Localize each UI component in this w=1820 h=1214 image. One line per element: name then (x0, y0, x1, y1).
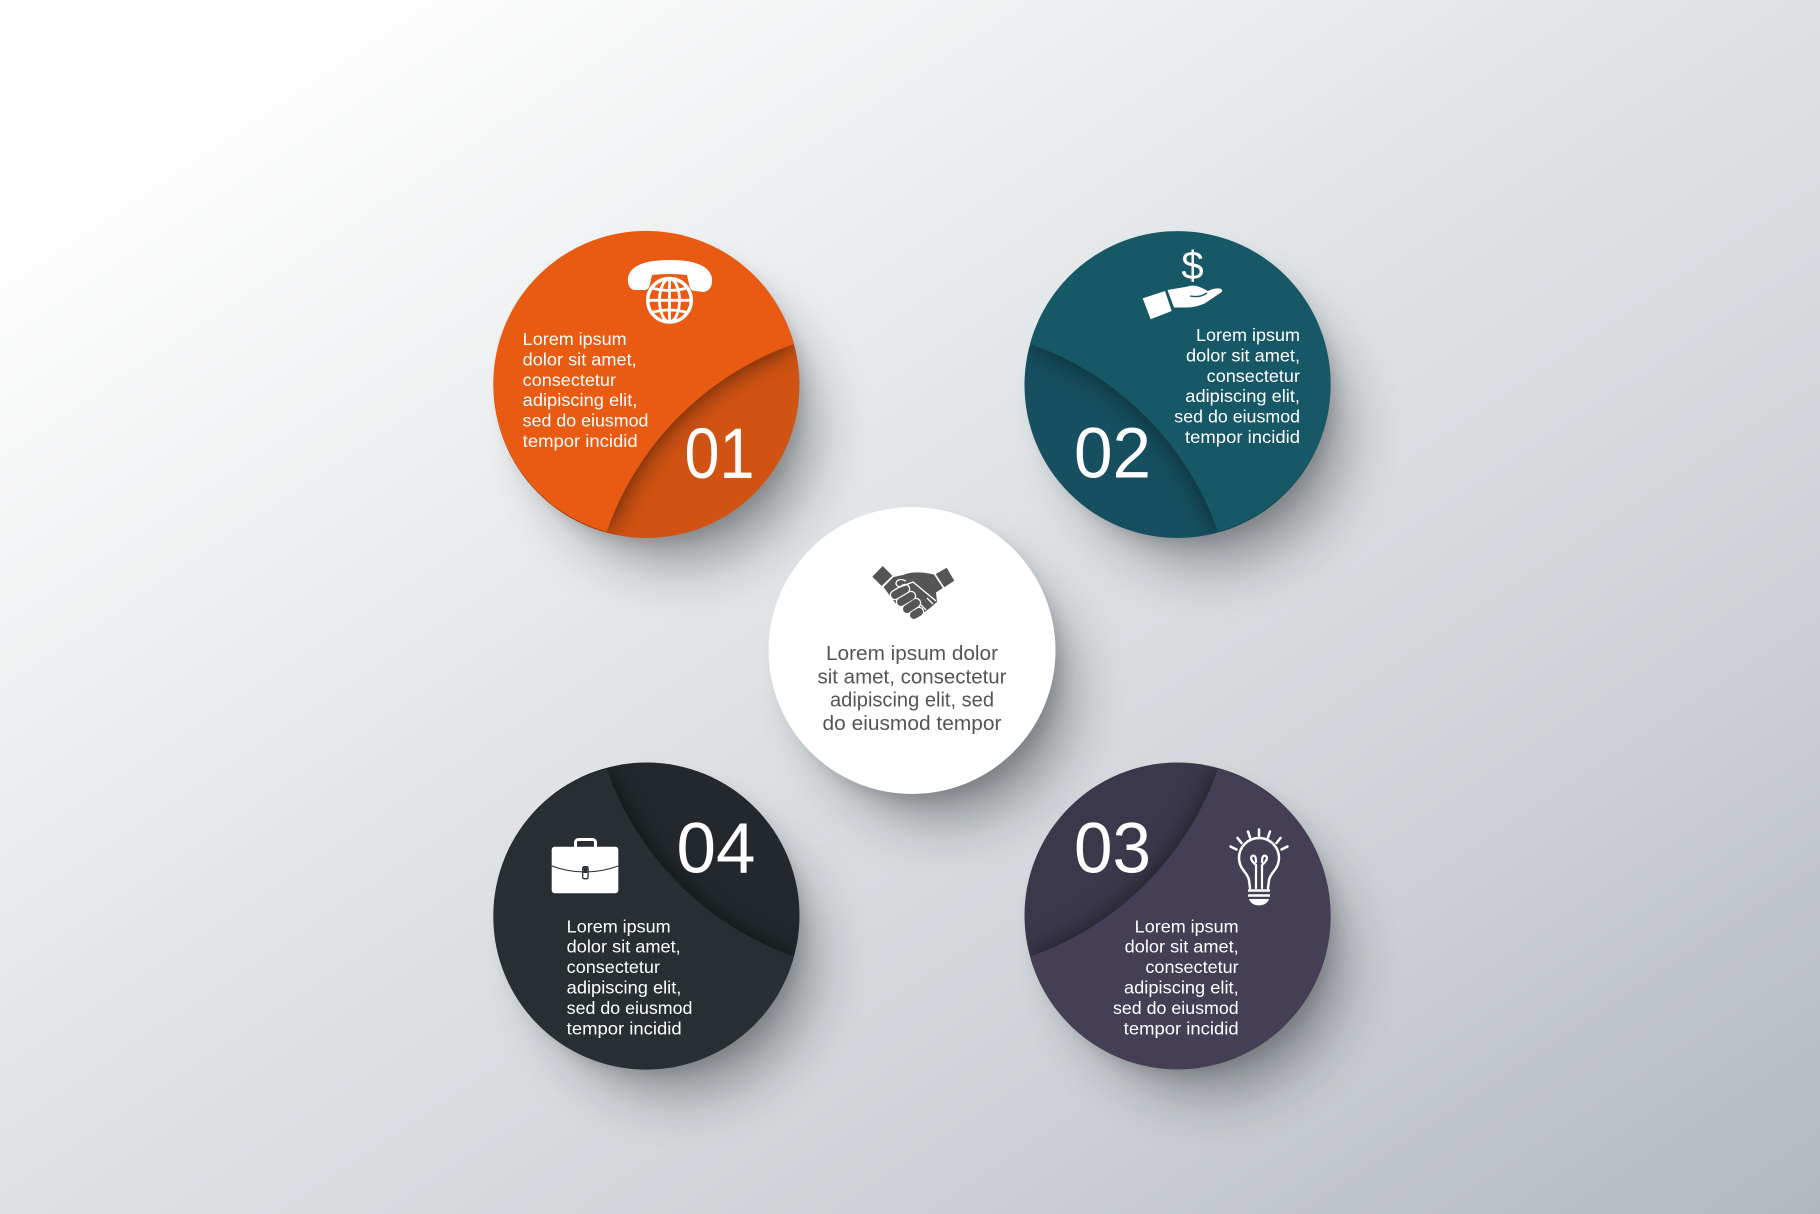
text block 04: sed do eiusmod (567, 998, 692, 1018)
icon: briefcase (552, 840, 618, 893)
text block 03: Lorem ipsum (1135, 916, 1239, 936)
text block 01: consectetur (523, 370, 616, 390)
text block 04: Lorem ipsum (567, 916, 671, 936)
panel: circle 02 teal (1024, 231, 1331, 538)
text block 04 (567, 916, 692, 1038)
panel: circle 01 orange (493, 231, 800, 538)
number 01: 01 (684, 415, 754, 494)
text block 03: sed do eiusmod (1113, 998, 1239, 1018)
text block center (818, 643, 1007, 735)
text block 02: adipiscing elit, (1185, 386, 1300, 406)
text block 02: dolor sit amet, (1186, 345, 1300, 365)
text block 01: tempor incidid (523, 431, 638, 451)
number 03: 03 (1074, 810, 1151, 888)
number 04: 04 (676, 810, 756, 888)
text block 03: adipiscing elit, (1124, 978, 1239, 998)
icon: light bulb (1230, 830, 1288, 906)
text block 01 (523, 329, 648, 451)
panel: circle 03 purple (1024, 762, 1331, 1069)
text block 03 (1113, 916, 1239, 1038)
panel: circle 04 charcoal (493, 762, 800, 1070)
text block 01: adipiscing elit, (523, 390, 637, 410)
text block 03: tempor incidid (1124, 1018, 1239, 1038)
text block 04: consectetur (567, 957, 660, 977)
icon: telephone with globe (628, 260, 712, 322)
icon: hand with dollar (1143, 244, 1222, 319)
text block center: sit amet, consectetur (818, 666, 1007, 688)
text block 03: consectetur (1145, 957, 1239, 977)
text block center: adipiscing elit, sed (830, 690, 994, 712)
number 02: 02 (1074, 414, 1151, 494)
text block 03: dolor sit amet, (1125, 937, 1239, 957)
text block center: do eiusmod tempor (822, 713, 1002, 735)
text block 02: tempor incidid (1185, 427, 1300, 447)
text block 01: dolor sit amet, (523, 349, 637, 369)
text block 04: adipiscing elit, (567, 978, 681, 998)
text block 04: dolor sit amet, (567, 937, 681, 957)
text block 02: sed do eiusmod (1174, 407, 1300, 427)
text block 01: Lorem ipsum (523, 329, 627, 349)
text block 02: consectetur (1207, 366, 1300, 386)
text block 02 (1174, 325, 1300, 447)
text block center: Lorem ipsum dolor (826, 643, 998, 665)
panel: center white circle (768, 507, 1056, 794)
text block 04: tempor incidid (567, 1018, 682, 1038)
icon: handshake (872, 566, 954, 615)
text block 01: sed do eiusmod (523, 411, 648, 431)
icon: hand with dollar: $ (1181, 244, 1204, 288)
soft drop shadows (503, 243, 1345, 1094)
text block 02: Lorem ipsum (1196, 325, 1300, 345)
